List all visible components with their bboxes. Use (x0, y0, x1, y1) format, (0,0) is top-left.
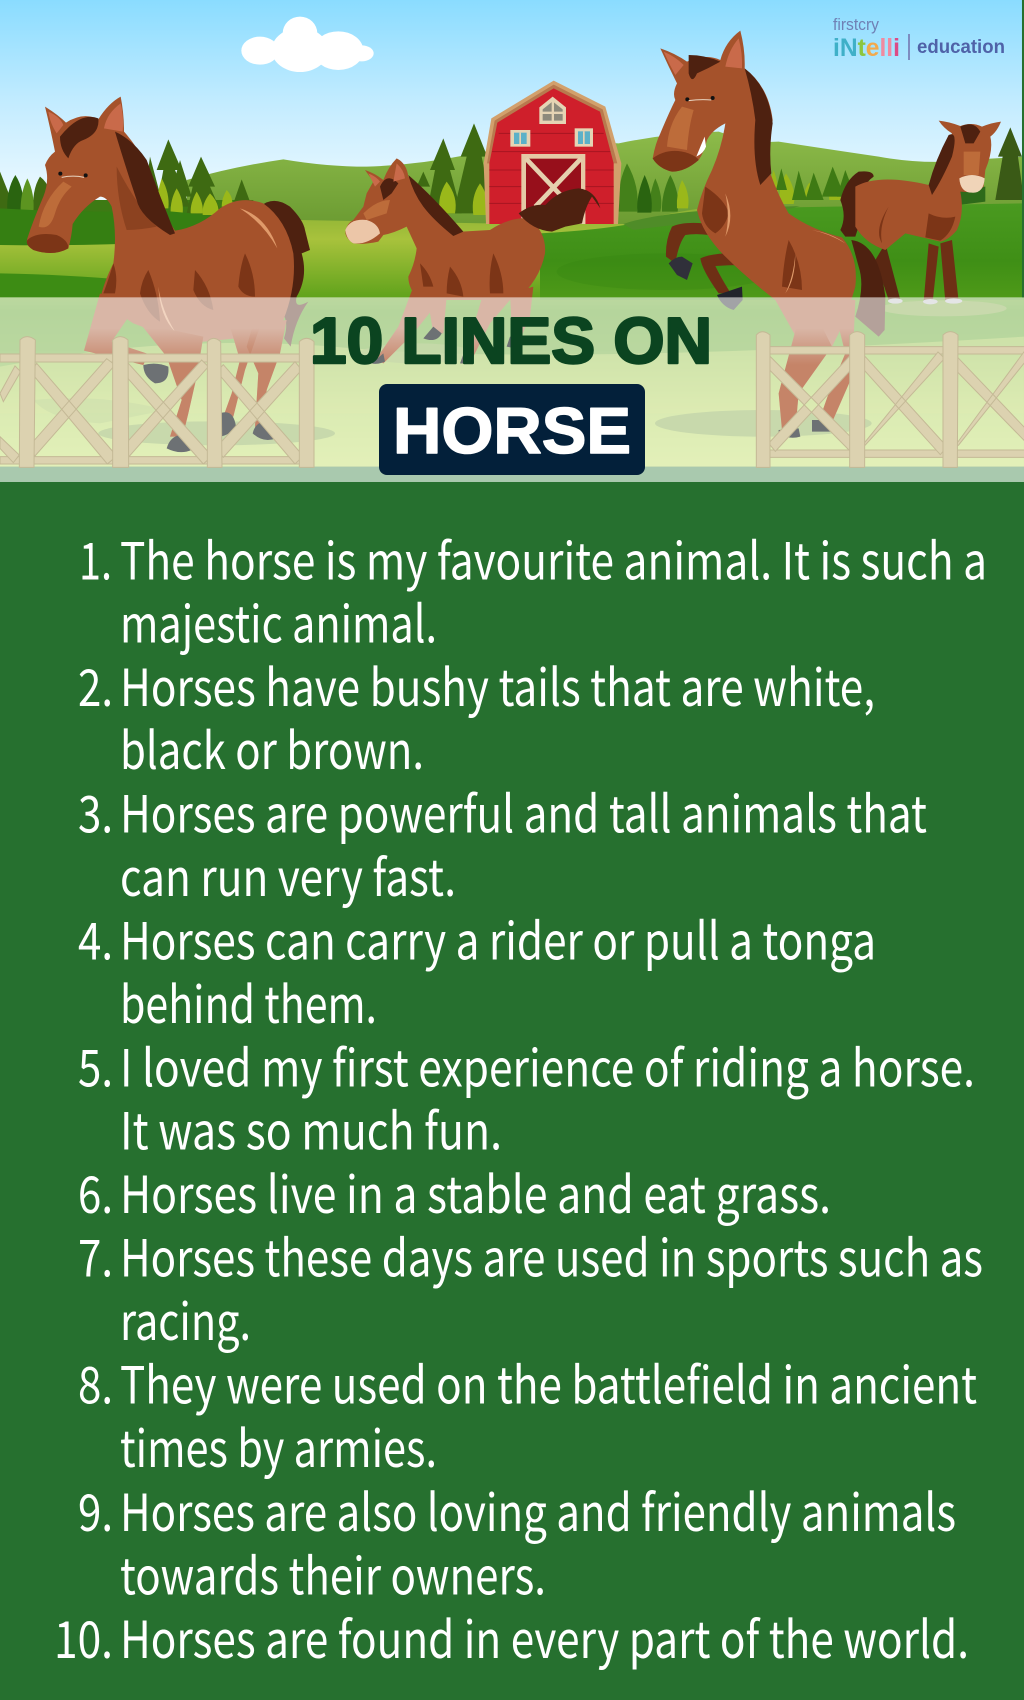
item 5: 5. (78, 1028, 113, 1102)
item 4: behind them. (120, 964, 377, 1038)
item 4: 4. (78, 900, 113, 974)
horse: rearing (653, 31, 885, 353)
item 9: towards their owners. (120, 1536, 546, 1610)
title: 10 lines on: 10 LINES ON (310, 304, 712, 377)
logo word firstcry: firstcry (833, 15, 879, 34)
logo word education: education (917, 37, 1005, 58)
translucent title overlay (0, 297, 1024, 482)
logo divider (908, 34, 910, 60)
item 1: majestic animal. (120, 584, 437, 658)
item 2: black or brown. (120, 710, 424, 784)
lower green band under overlay (0, 467, 1024, 482)
horse: small right (840, 121, 1001, 304)
item 3 (78, 774, 927, 911)
item 2: 2. (78, 647, 113, 721)
item 6: Horses live in a stable and eat grass. (120, 1154, 831, 1228)
panel: numbered list on green background (54, 520, 987, 1673)
item 5 (78, 1028, 975, 1164)
logo: firstcry intelli education (833, 15, 1005, 62)
item 7: 7. (78, 1218, 113, 1292)
item 7 (78, 1218, 983, 1355)
item 7: racing. (120, 1281, 251, 1355)
item 3: 3. (78, 774, 113, 848)
hooves (143, 327, 830, 452)
item 9: 9. (78, 1472, 113, 1546)
horse: foal (345, 158, 545, 300)
green meadow ground (0, 208, 1024, 467)
item 10: 10. (54, 1599, 113, 1673)
meadow shading (0, 203, 1024, 423)
background (0, 472, 1024, 1700)
item 1 (79, 520, 987, 658)
distant hills (187, 132, 1024, 240)
sky (0, 0, 1024, 233)
panel: farm scene header (0, 0, 1024, 482)
badge background (379, 384, 645, 475)
fence: left (0, 337, 314, 467)
tree line (0, 123, 1024, 223)
item 3: can run very fast. (120, 837, 456, 911)
item 9 (78, 1472, 956, 1610)
item 1: 1. (79, 520, 112, 594)
right edge stripe (1022, 0, 1024, 297)
item 5: It was so much fun. (120, 1090, 502, 1164)
title badge: horse (379, 384, 645, 475)
leg colour strengthening (84, 287, 855, 437)
item 2 (78, 647, 875, 784)
red barn (484, 81, 621, 224)
logo word intelli: iNtelli (833, 34, 900, 62)
cloud (241, 17, 374, 72)
item 2: Horses have bushy tails that are white, (120, 647, 875, 721)
item 4: Horses can carry a rider or pull a tonga (120, 900, 876, 974)
item 6: 6. (78, 1154, 113, 1228)
item 8 (78, 1344, 977, 1482)
fence: right (756, 332, 1024, 467)
item 4 (78, 900, 876, 1038)
legs under the overlay (84, 287, 855, 437)
item 8: times by armies. (120, 1408, 437, 1482)
ground shadows (98, 300, 1007, 445)
badge word: HORSE (393, 394, 631, 467)
foal tail on barn (519, 188, 600, 232)
horse: large left (27, 97, 310, 347)
item 8: 8. (78, 1344, 113, 1418)
